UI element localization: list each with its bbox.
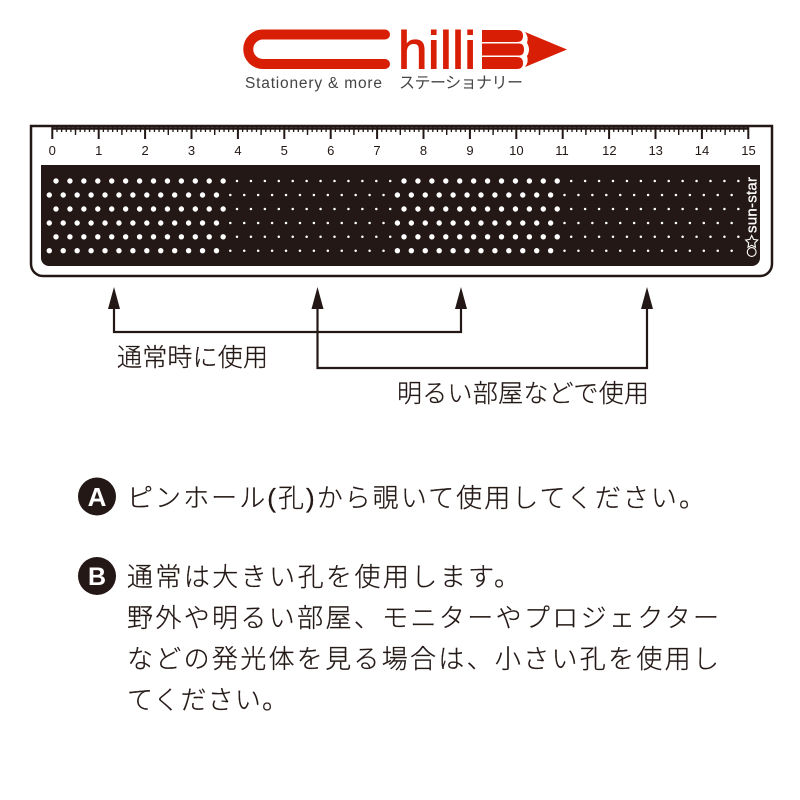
note B text bbox=[127, 562, 719, 715]
black pinhole panel bbox=[41, 165, 760, 266]
ruler numbers: 14 bbox=[695, 143, 709, 158]
arrows: bright room use bbox=[312, 287, 653, 368]
note B text: てください。 bbox=[127, 685, 288, 715]
logo tagline japanese: ステーショナリー bbox=[399, 75, 523, 92]
arrowhead left bbox=[312, 287, 324, 309]
badge B bbox=[78, 557, 116, 595]
ruler numbers: 10 bbox=[509, 143, 524, 158]
logo letter C bbox=[248, 34, 385, 64]
icon: pencil bbox=[482, 30, 567, 69]
ruler numbers: 8 bbox=[420, 143, 427, 158]
ruler numbers: 6 bbox=[327, 143, 334, 158]
logo tagline: Stationery & more bbox=[245, 75, 382, 92]
ruler numbers: 1 bbox=[95, 143, 102, 158]
ruler numbers: 2 bbox=[141, 143, 149, 158]
ruler numbers: 12 bbox=[602, 143, 617, 158]
icon: sun-star mark bbox=[746, 236, 758, 256]
label: normal use: 通常時に使用 bbox=[117, 344, 268, 372]
logo word hilli: hilli bbox=[398, 22, 476, 80]
arrowhead right bbox=[641, 287, 653, 309]
ruler numbers: 3 bbox=[188, 143, 195, 158]
note A text: ピンホール(孔)から覗いて使用してください。 bbox=[127, 483, 705, 513]
ruler numbers bbox=[49, 143, 756, 158]
badge B: B bbox=[88, 563, 106, 591]
note B text: などの発光体を見る場合は、小さい孔を使用し bbox=[127, 644, 719, 674]
arrowhead right bbox=[455, 287, 467, 309]
small pinholes bbox=[230, 181, 739, 251]
ruler scale ticks bbox=[51, 128, 750, 133]
ruler outline bbox=[31, 126, 772, 276]
arrow lines bright room use bbox=[318, 305, 647, 368]
badge A bbox=[78, 478, 116, 516]
note B bbox=[78, 557, 719, 715]
large pinholes bbox=[49, 181, 558, 251]
note B text: 通常は大きい孔を使用します。 bbox=[127, 562, 520, 592]
ruler numbers: 5 bbox=[281, 143, 288, 158]
ruler numbers: 11 bbox=[555, 143, 569, 158]
arrow lines normal use bbox=[114, 305, 461, 332]
ruler numbers: 7 bbox=[373, 143, 381, 158]
ruler numbers: 0 bbox=[49, 143, 56, 158]
ruler numbers: 4 bbox=[234, 143, 242, 158]
ruler numbers: 15 bbox=[741, 143, 756, 158]
ruler bbox=[31, 126, 772, 276]
label: bright room use: 明るい部屋などで使用 bbox=[397, 380, 649, 408]
note B text: 野外や明るい部屋、モニターやプロジェクター bbox=[127, 603, 719, 633]
arrows: normal use bbox=[108, 287, 467, 332]
logo: chilli stationery bbox=[245, 22, 567, 92]
ruler numbers: 13 bbox=[648, 143, 663, 158]
badge A: A bbox=[88, 482, 107, 512]
brand sun-star: sun-star bbox=[744, 177, 760, 233]
note A bbox=[78, 478, 705, 516]
arrowhead left bbox=[108, 287, 120, 309]
ruler numbers: 9 bbox=[466, 143, 474, 158]
